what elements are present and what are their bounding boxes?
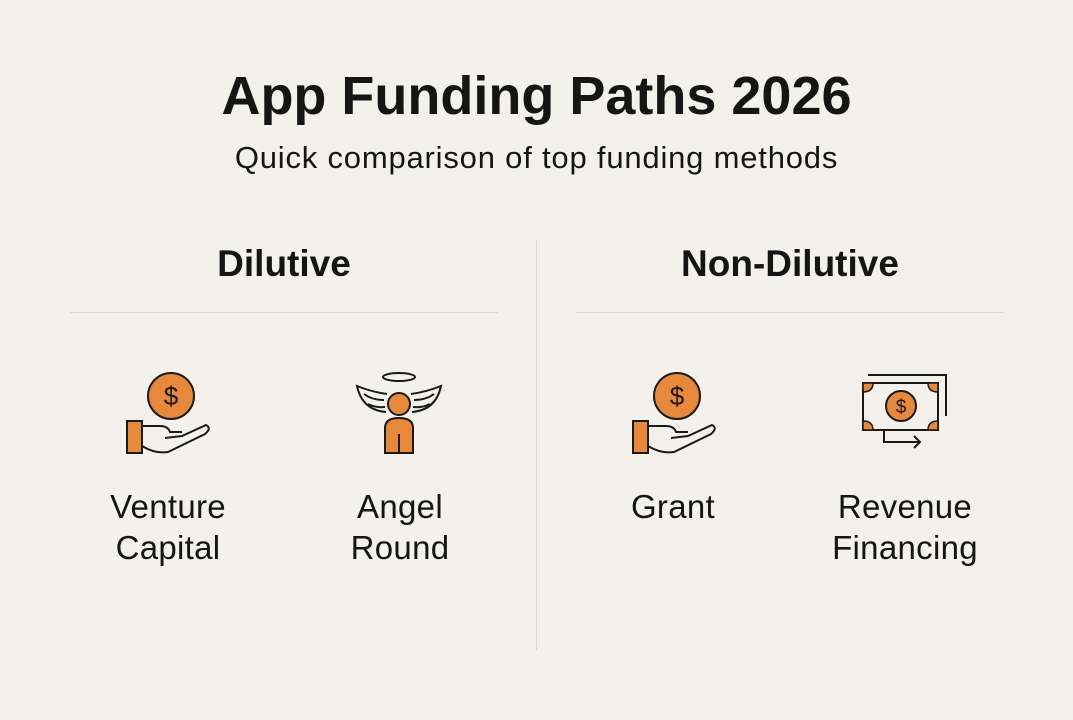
icon: grant hand with coin: [632, 372, 716, 454]
panel: dilutive: [70, 243, 498, 566]
heading: dilutive: Dilutive: [217, 243, 351, 284]
label: angel round: [351, 488, 449, 566]
title: App Funding Paths 2026: [221, 66, 852, 126]
label: venture capital: Venture: [110, 488, 226, 525]
label: venture capital: [110, 488, 226, 566]
icon: hand with coin: [126, 372, 210, 454]
label: revenue financing: Revenue: [838, 488, 972, 525]
label: angel round: Angel: [357, 488, 443, 525]
icon: revenue bills: [862, 374, 947, 449]
label: revenue financing: [832, 488, 978, 566]
label: venture capital: Capital: [116, 529, 220, 566]
icon: angel: [356, 372, 442, 454]
icon: hand with coin: $: [164, 381, 179, 411]
label: revenue financing: Financing: [832, 529, 978, 566]
label: grant: Grant: [631, 488, 715, 525]
icon: grant hand with coin: $: [670, 381, 685, 411]
heading: non-dilutive: Non-Dilutive: [681, 243, 899, 284]
icon: revenue bills: $: [896, 397, 907, 418]
subtitle: Quick comparison of top funding methods: [235, 140, 838, 175]
panel: non-dilutive: [576, 243, 1004, 566]
label: angel round: Round: [351, 529, 449, 566]
